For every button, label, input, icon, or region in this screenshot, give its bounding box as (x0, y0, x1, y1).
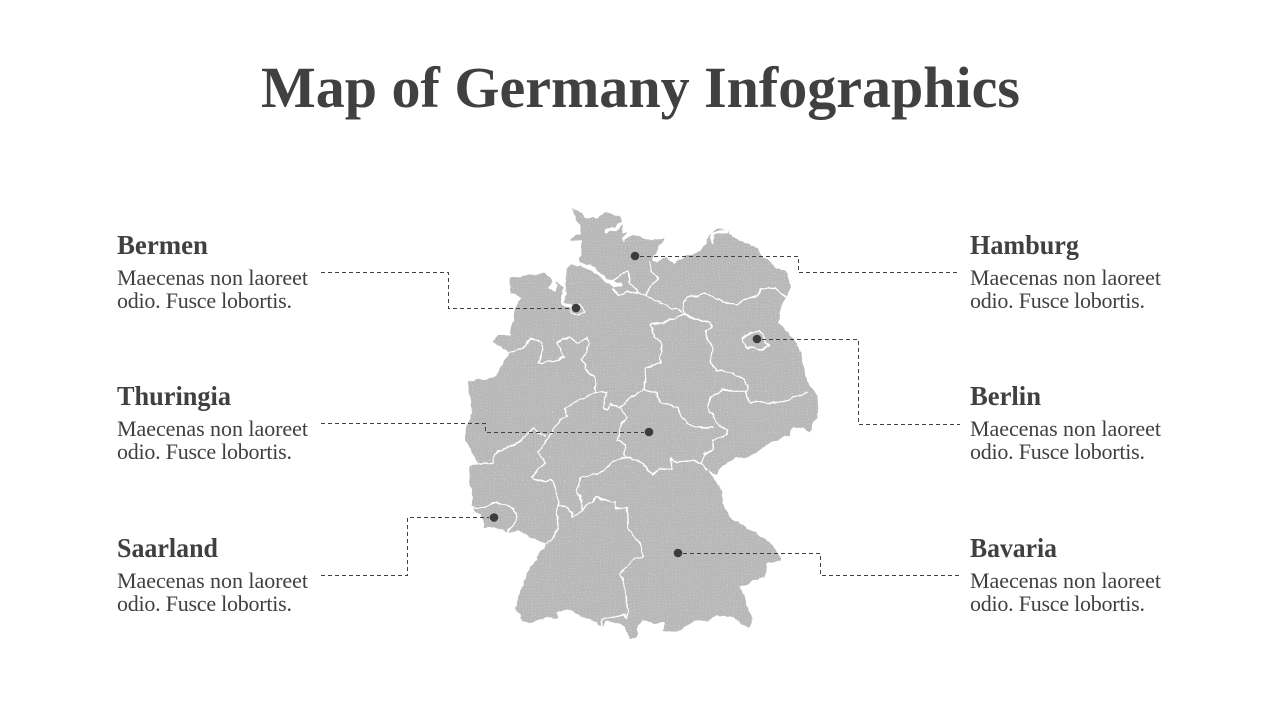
border: Baden-Wurttemberg and Bavaria (582, 498, 643, 628)
leader line (321, 424, 644, 432)
text block: Maecenas non laoreet (970, 568, 1161, 593)
text block (970, 265, 1161, 313)
leader line (321, 518, 489, 576)
text block: Maecenas non laoreet (117, 568, 308, 593)
text block (970, 416, 1161, 464)
border: Brandenburg north (682, 287, 785, 314)
text block (117, 265, 308, 313)
leader line (683, 554, 960, 576)
leader line (762, 340, 960, 424)
text block: odio. Fusce lobortis. (970, 288, 1145, 313)
panel: Bavaria (674, 533, 1161, 616)
border: Hesse and Bavaria (557, 457, 627, 517)
border: Bremen (570, 304, 585, 315)
rivers and coastal inlets (562, 223, 727, 307)
heading: Bermen (117, 230, 208, 260)
title: Map of Germany Infographics (261, 55, 1020, 120)
leader line (321, 272, 571, 308)
text block: odio. Fusce lobortis. (970, 439, 1145, 464)
text block (117, 568, 308, 616)
border: Thuringia east (702, 390, 745, 470)
heading: Hamburg (970, 230, 1079, 260)
border: Hamburg and Schleswig-Holstein (610, 262, 658, 294)
panel: Saarland (117, 513, 498, 616)
border: NRW and Rhineland-Palatinate (477, 428, 545, 463)
text block (970, 568, 1161, 616)
border: Saxony-Anhalt and Brandenburg (684, 314, 807, 403)
border: Saarland (472, 502, 518, 533)
border: Saxony-Anhalt and Lower Saxony (643, 314, 713, 428)
text block (117, 416, 308, 464)
border: Lower Saxony and NRW (510, 338, 620, 410)
marker (674, 549, 682, 557)
heading: Thuringia (117, 381, 231, 411)
heading: Berlin (970, 381, 1041, 411)
heading: Bavaria (970, 533, 1057, 563)
border: Thuringia and Bavaria (627, 457, 702, 475)
panel: Thuringia (117, 381, 653, 464)
panel: Hamburg (631, 230, 1161, 313)
text block: odio. Fusce lobortis. (117, 439, 292, 464)
marker (753, 335, 761, 343)
border: Rhineland-Palatinate and Baden-Wurttemberg (547, 508, 558, 544)
text block: Maecenas non laoreet (117, 265, 308, 290)
border: NRW and Hesse (531, 392, 595, 508)
country shape (465, 208, 819, 639)
panel: Berlin (753, 335, 1161, 464)
text block: odio. Fusce lobortis. (117, 591, 292, 616)
marker (572, 304, 580, 312)
marker (631, 252, 639, 260)
marker (645, 428, 653, 436)
heading: Saarland (117, 533, 218, 563)
text block: Maecenas non laoreet (970, 416, 1161, 441)
border: Lower Saxony north (613, 288, 682, 312)
border: Berlin (743, 331, 770, 350)
text block: odio. Fusce lobortis. (970, 591, 1145, 616)
text block: Maecenas non laoreet (117, 416, 308, 441)
map of Germany (465, 208, 819, 639)
border: Thuringia and Hesse (617, 391, 643, 457)
panel: Bermen (117, 230, 580, 313)
leader line (640, 256, 960, 272)
state borders (472, 262, 807, 628)
text block: Maecenas non laoreet (970, 265, 1161, 290)
text block: odio. Fusce lobortis. (117, 288, 292, 313)
marker (490, 513, 498, 522)
